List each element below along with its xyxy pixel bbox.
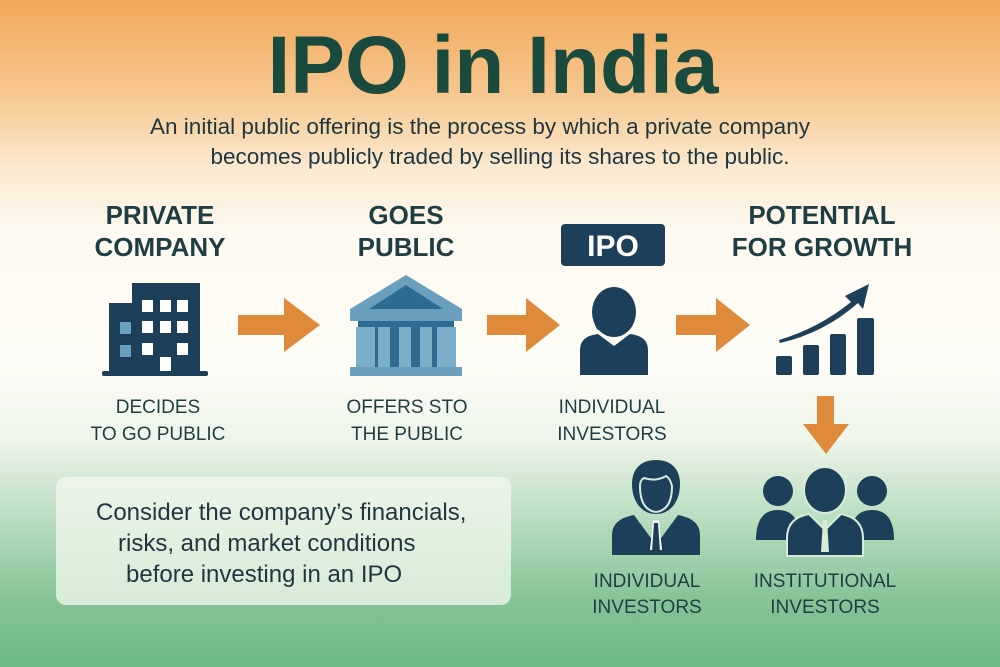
icon: building (102, 283, 208, 376)
caption: offers to the public: OFFERS STO (346, 397, 468, 418)
callout: risks, and market conditions (118, 530, 415, 557)
heading: potential for growth: POTENTIAL (748, 200, 896, 230)
subtitle: An initial public offering is the process by which a private company (150, 114, 811, 139)
heading: private company: PRIVATE (106, 200, 214, 230)
caption: offers to the public (346, 397, 468, 445)
arrow 1 (238, 298, 320, 352)
heading: IPO box (561, 224, 665, 266)
heading: goes public (358, 200, 455, 262)
callout: before investing in an IPO (126, 561, 402, 588)
heading: potential for growth (732, 200, 912, 262)
icon: growth chart (776, 284, 874, 375)
icon: bank (350, 275, 462, 376)
callout (56, 477, 511, 605)
heading: goes public: GOES (368, 200, 444, 230)
caption: individual investors 2: INVESTORS (592, 597, 702, 618)
title: IPO in India (267, 20, 720, 111)
caption: institutional investors: INSTITUTIONAL (754, 571, 896, 592)
heading: IPO box: IPO (587, 230, 639, 263)
arrow 2 (487, 298, 560, 352)
caption: individual investors: INDIVIDUAL (559, 397, 665, 418)
callout: Consider the company’s financials, (96, 499, 466, 526)
heading: potential for growth: FOR GROWTH (732, 232, 912, 262)
subtitle (150, 114, 811, 169)
caption: decides to go public: DECIDES (116, 397, 200, 418)
caption: decides to go public (91, 397, 225, 445)
icon: institutional investors (756, 467, 894, 556)
caption: decides to go public: TO GO PUBLIC (91, 424, 225, 445)
caption: institutional investors (754, 571, 896, 618)
caption: institutional investors: INVESTORS (770, 597, 880, 618)
arrow 3 (676, 298, 750, 352)
arrow down (803, 396, 849, 454)
heading: private company (95, 200, 225, 262)
heading: private company: COMPANY (95, 232, 225, 262)
caption: offers to the public: THE PUBLIC (351, 424, 463, 445)
icon: individual investor (612, 460, 700, 555)
subtitle: becomes publicly traded by selling its shares to the public. (210, 144, 790, 169)
caption: individual investors 2 (592, 571, 702, 618)
heading: goes public: PUBLIC (358, 232, 455, 262)
caption: individual investors 2: INDIVIDUAL (594, 571, 700, 592)
caption: individual investors: INVESTORS (557, 424, 667, 445)
icon: person (580, 287, 648, 375)
caption: individual investors (557, 397, 667, 445)
